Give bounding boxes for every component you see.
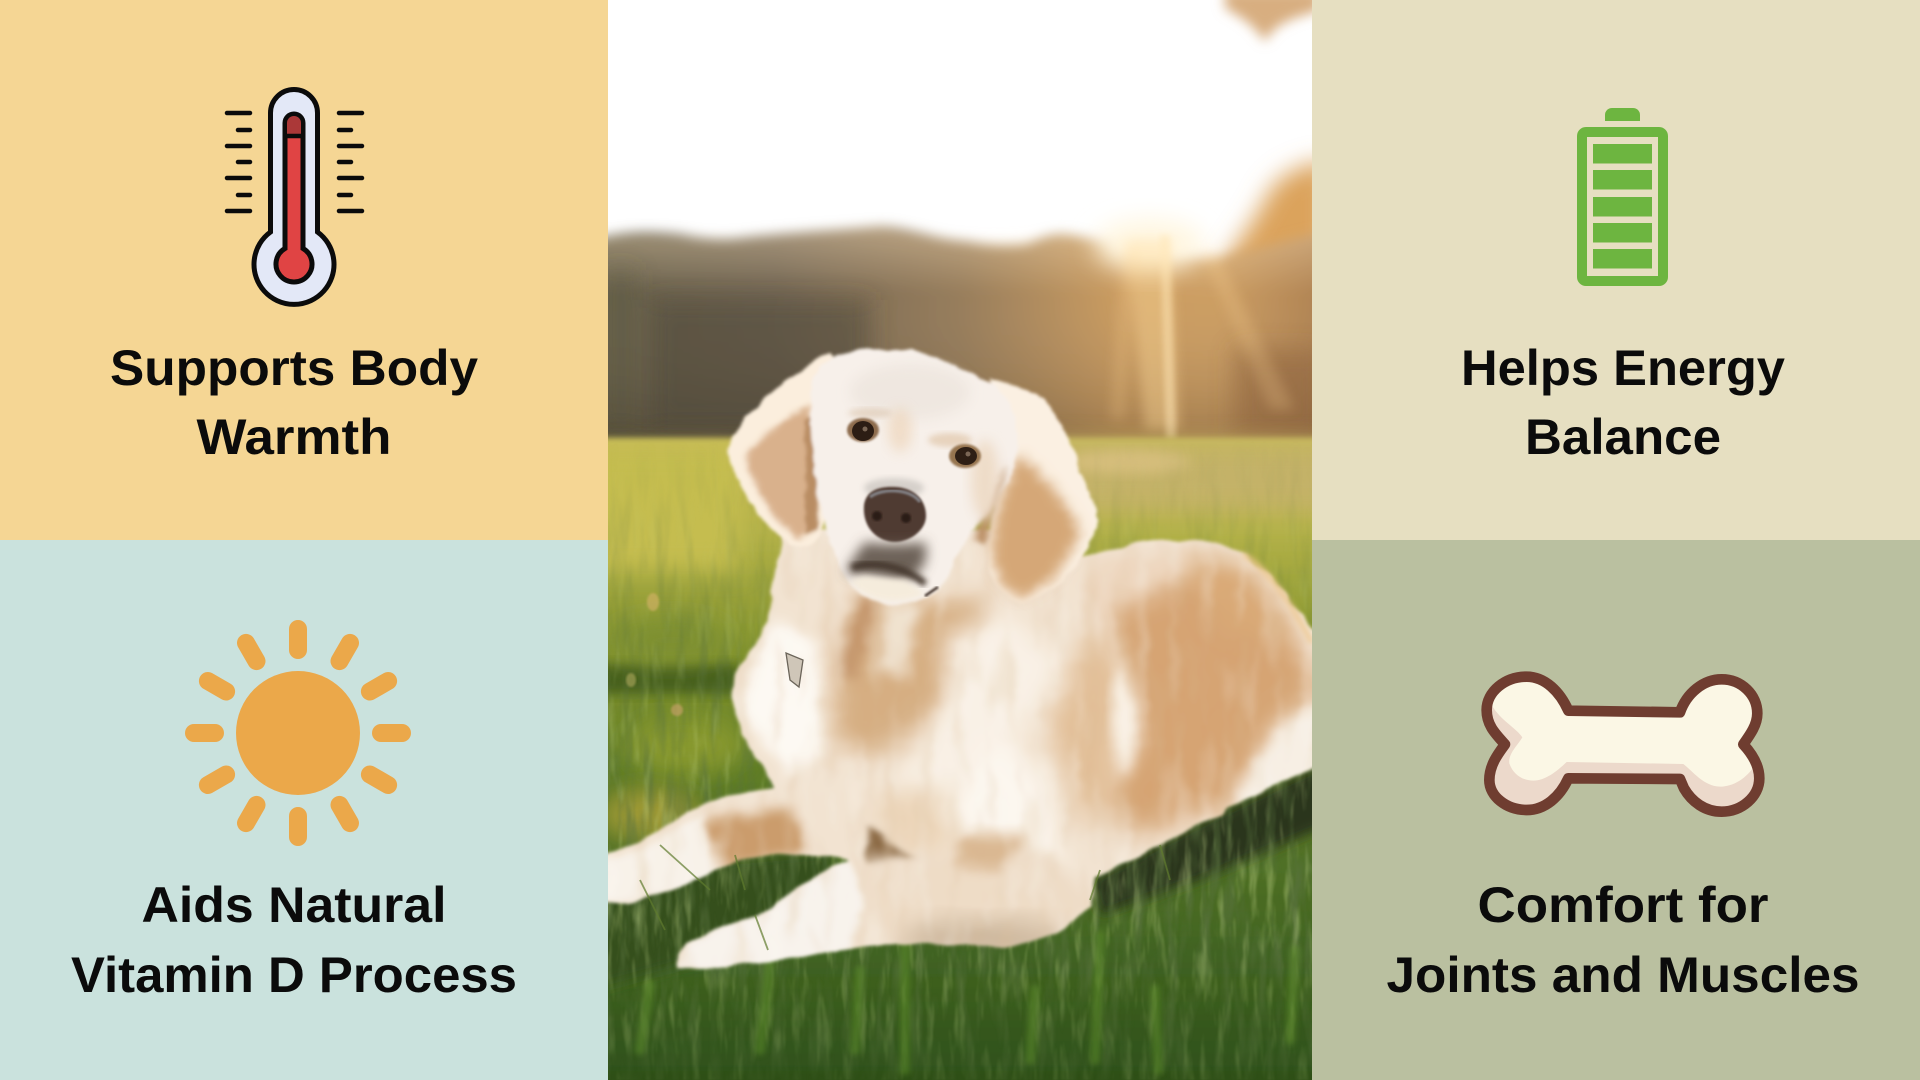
photo: golden retriever lying in sunlit grass [580, 0, 1340, 1080]
nose [864, 487, 926, 542]
heading: comfort for joints and muscles: Comfort for [1478, 877, 1768, 933]
fur texture [712, 544, 1312, 946]
panel: vitamin D: Vitamin D Process [71, 947, 517, 1003]
grass light and shadow patches [590, 442, 1340, 990]
leaves top right [1225, 0, 1320, 42]
left ear [728, 352, 850, 547]
forest shadows [619, 279, 1312, 431]
icon: bone [1480, 677, 1763, 817]
dog head [728, 349, 1098, 605]
icon: sun [194, 629, 402, 837]
panel: joints and muscles [1312, 540, 1920, 1080]
icon: thermometer [227, 89, 362, 304]
mouth [845, 542, 926, 582]
dog body [608, 527, 1312, 972]
face [810, 349, 1017, 605]
panel: energy balance [1312, 0, 1920, 540]
collar tag [786, 653, 803, 687]
panel: vitamin D [0, 540, 608, 1080]
icon: battery [1582, 108, 1663, 281]
panel: body warmth [0, 0, 608, 540]
sun rays [1095, 219, 1295, 440]
fur shading [1095, 571, 1320, 835]
right ear [989, 378, 1098, 602]
heading: helps energy balance: Helps Energy [1461, 340, 1785, 396]
sunlit tree on the right [1214, 146, 1312, 264]
heading: supports body warmth: Supports Body [110, 340, 478, 396]
panel: joints and muscles: Joints and Muscles [1386, 947, 1860, 1003]
grass field [580, 438, 1340, 1080]
back rim light [1243, 554, 1312, 643]
eyes [847, 418, 879, 442]
forehead shading [858, 366, 962, 414]
heading: aids natural vitamin D process: Aids Natural [142, 877, 446, 933]
panel: energy balance: Balance [1525, 409, 1721, 465]
grass texture [608, 498, 1312, 1080]
grass over legs [640, 845, 1170, 950]
foreground soft blades [640, 935, 1295, 1070]
distant tree line [590, 226, 1330, 450]
muzzle shadow [864, 478, 924, 498]
panel: body warmth: Warmth [196, 409, 392, 465]
